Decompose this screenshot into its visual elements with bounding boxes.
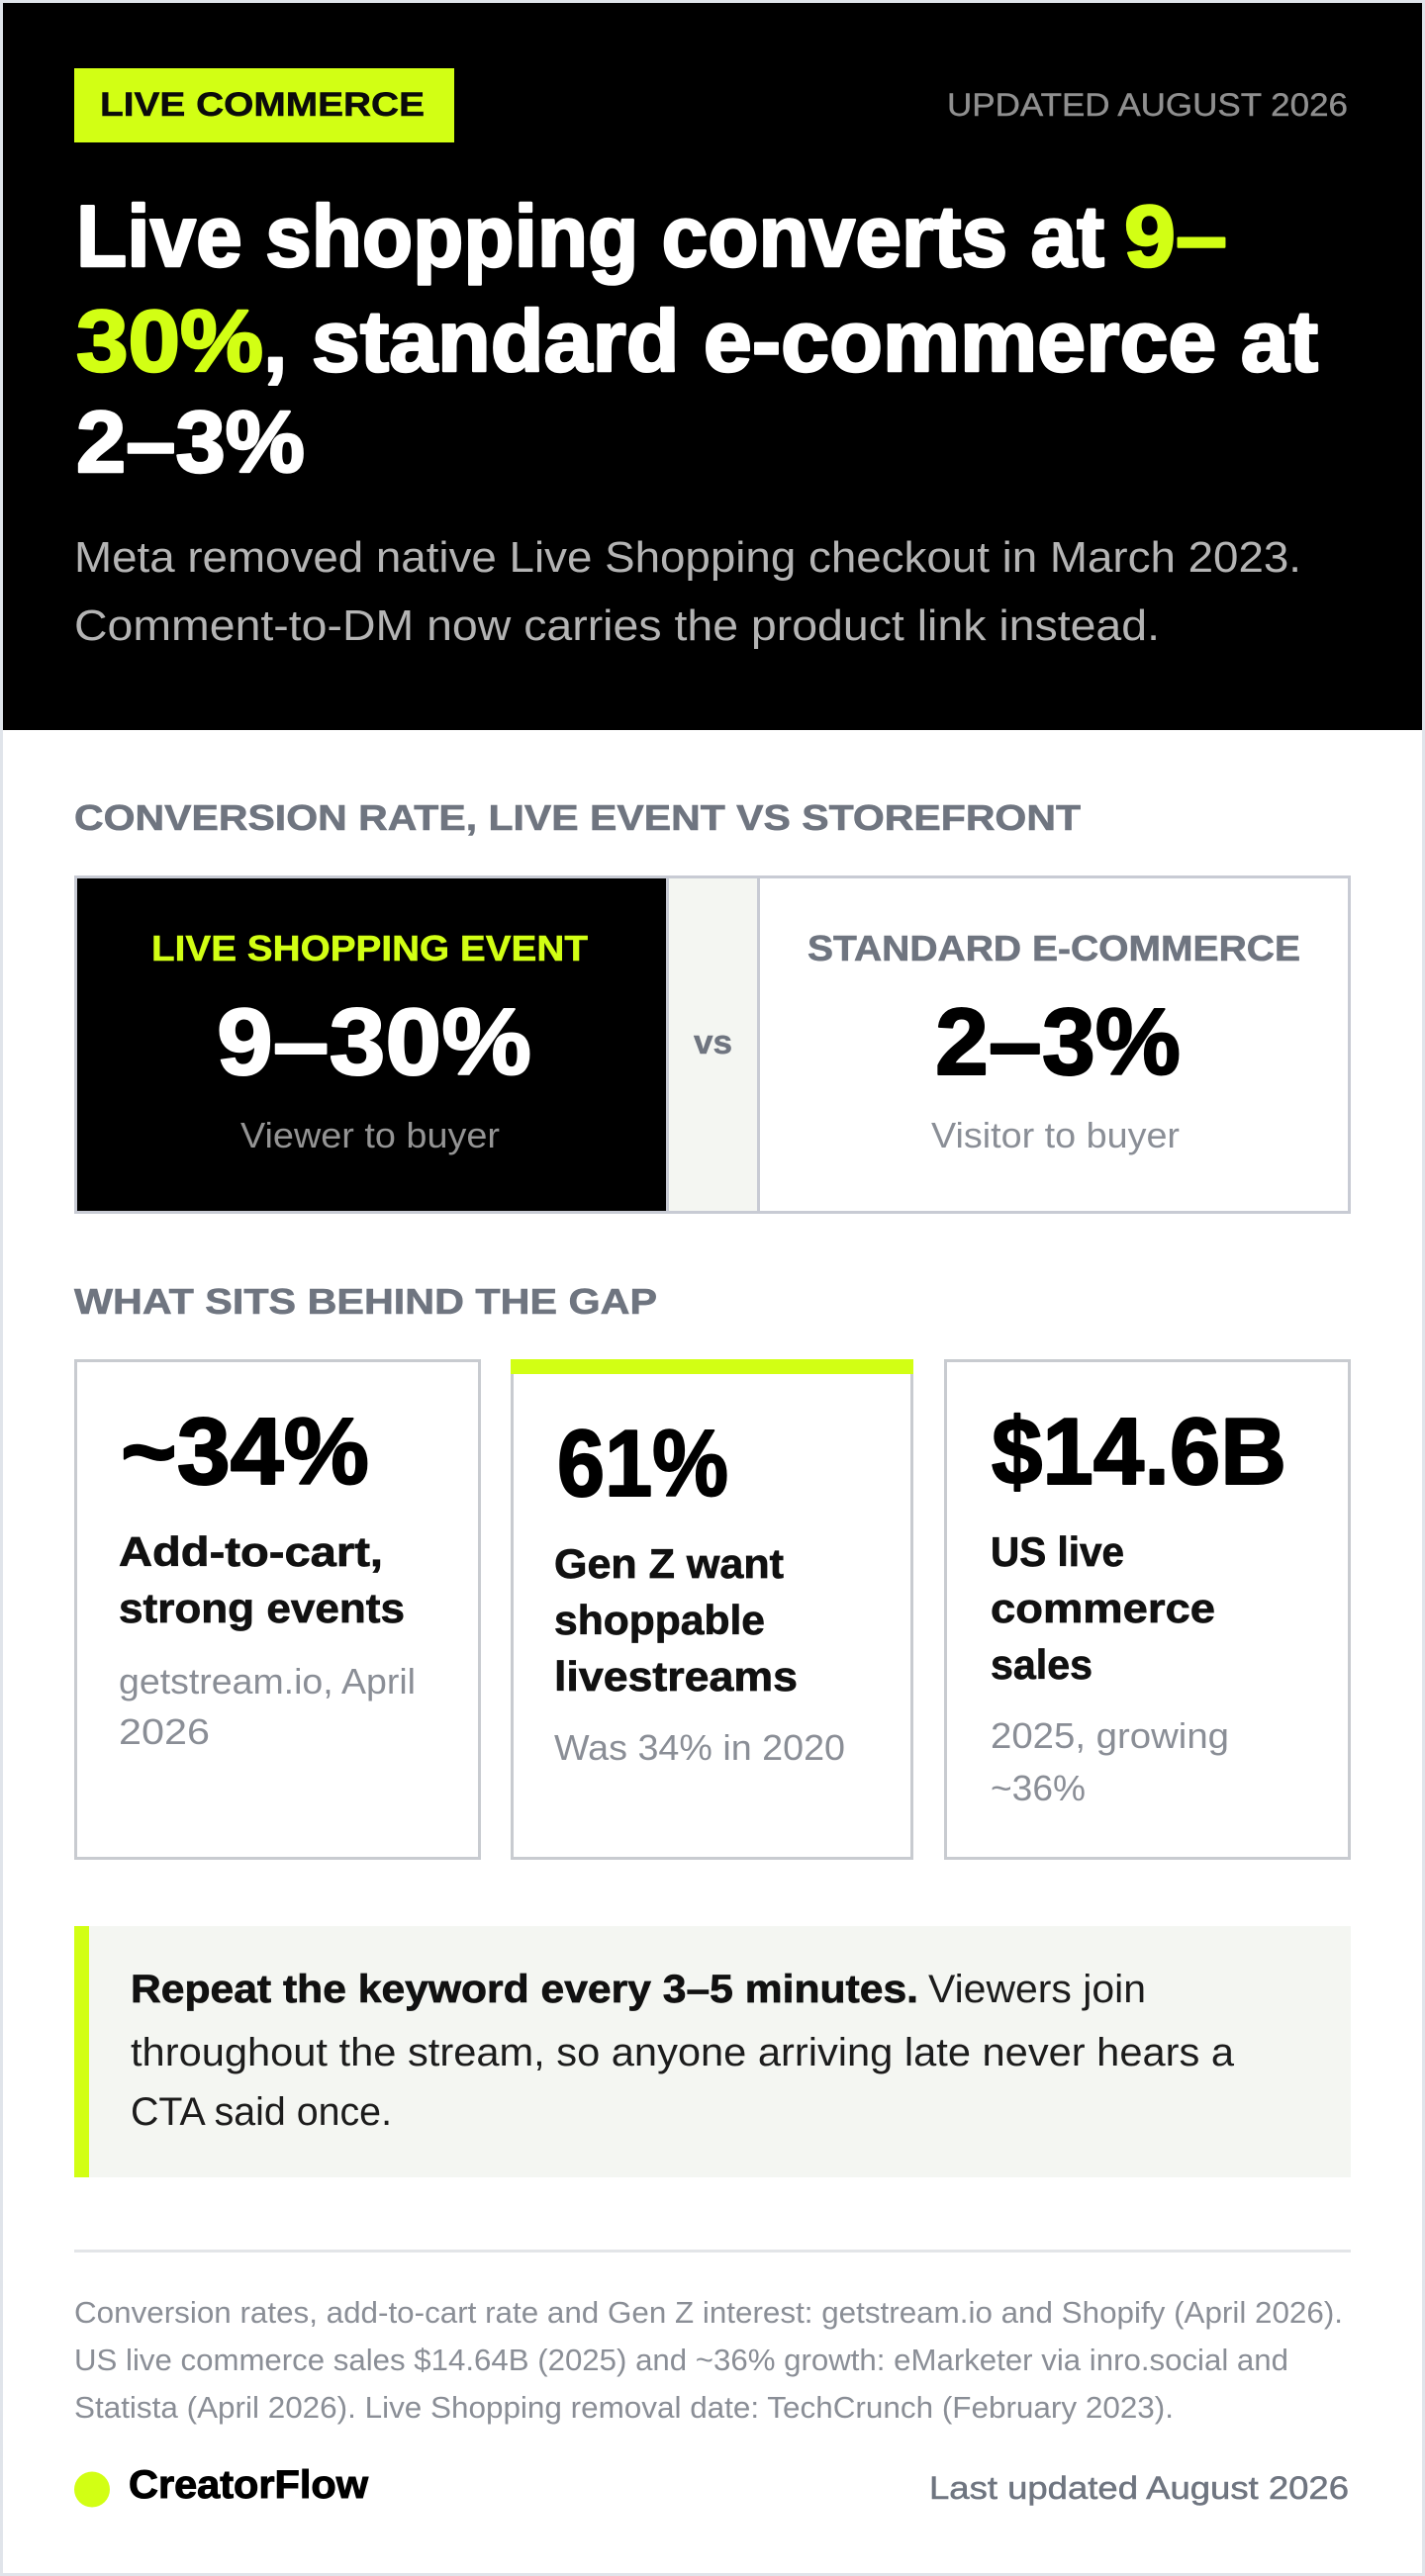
sources <box>74 2295 1343 2425</box>
brand: creatorflow: CreatorFlow <box>129 2463 369 2507</box>
card: us sales: sales <box>991 1641 1092 1688</box>
title: Live shopping converts at <box>76 187 1104 285</box>
subtitle <box>74 533 1301 650</box>
tag: live commerce: LIVE COMMERCE <box>100 86 425 124</box>
vs divider: vs <box>694 1024 732 1061</box>
card: add-to-cart: 2026 <box>119 1711 210 1752</box>
panel: standard e-commerce <box>808 928 1300 1155</box>
title: , standard e-commerce at <box>263 292 1318 390</box>
panel: live shopping event: 9–30% <box>217 989 531 1095</box>
callout: repeat the keyword: Repeat the keyword every 3–5 minutes. <box>131 1968 918 2011</box>
card: gen z: livestreams <box>554 1653 798 1700</box>
title: 30% <box>76 292 263 390</box>
card: us sales: US live <box>991 1528 1124 1575</box>
callout: repeat the keyword: throughout the stream, so anyone arriving late never hears a <box>131 2031 1235 2074</box>
callout: repeat the keyword: Viewers join <box>928 1968 1146 2011</box>
title: 9– <box>1124 187 1227 285</box>
card: us sales: 2025, growing <box>991 1715 1229 1756</box>
panel: comparison <box>75 876 1350 1213</box>
subtitle: Meta removed native Live Shopping checkout in March 2023. <box>74 533 1301 582</box>
sources: Conversion rates, add-to-cart rate and Gen Z interest: getstream.io and Shopify (April 2026). <box>74 2295 1343 2330</box>
updated date: UPDATED AUGUST 2026 <box>947 87 1348 123</box>
panel: live shopping event: LIVE SHOPPING EVENT <box>151 928 588 968</box>
tag: live commerce <box>74 68 454 142</box>
sources: Statista (April 2026). Live Shopping removal date: TechCrunch (February 2023). <box>74 2390 1174 2425</box>
heading: conversion rate: CONVERSION RATE, LIVE EVENT VS STOREFRONT <box>74 797 1081 838</box>
panel: live shopping event: Viewer to buyer <box>240 1115 500 1155</box>
card: add-to-cart: getstream.io, April <box>119 1661 416 1702</box>
card: us sales: $14.6B <box>992 1399 1286 1505</box>
callout: repeat the keyword <box>74 1926 1351 2177</box>
panel: live shopping event <box>77 878 666 1211</box>
vs divider <box>666 878 760 1211</box>
callout: repeat the keyword: CTA said once. <box>131 2090 392 2134</box>
panel: standard e-commerce: Visitor to buyer <box>931 1115 1180 1155</box>
card: gen z <box>511 1359 913 1858</box>
title <box>76 187 1318 491</box>
card: gen z: shoppable <box>554 1597 765 1643</box>
card: us sales: ~36% <box>991 1768 1086 1808</box>
heading: behind the gap: WHAT SITS BEHIND THE GAP <box>74 1281 657 1322</box>
card: gen z: Was 34% in 2020 <box>554 1727 845 1768</box>
card: add-to-cart <box>75 1361 479 1858</box>
last updated: Last updated August 2026 <box>929 2470 1349 2506</box>
card: add-to-cart: Add-to-cart, <box>119 1528 383 1575</box>
card: us sales: commerce <box>991 1585 1215 1631</box>
subtitle: Comment-to-DM now carries the product link instead. <box>74 601 1160 650</box>
panel: standard e-commerce: STANDARD E-COMMERCE <box>808 928 1300 968</box>
card: us sales <box>946 1361 1350 1858</box>
panel: standard e-commerce: 2–3% <box>935 989 1181 1095</box>
panel: dark header <box>3 3 1422 730</box>
card: gen z: 61% <box>557 1411 728 1517</box>
card: add-to-cart: ~34% <box>121 1399 369 1505</box>
sources: US live commerce sales $14.64B (2025) and ~36% growth: eMarketer via inro.social and <box>74 2343 1288 2377</box>
title: 2–3% <box>76 393 305 491</box>
card: add-to-cart: strong events <box>119 1585 405 1631</box>
card: gen z: Gen Z want <box>554 1540 784 1587</box>
